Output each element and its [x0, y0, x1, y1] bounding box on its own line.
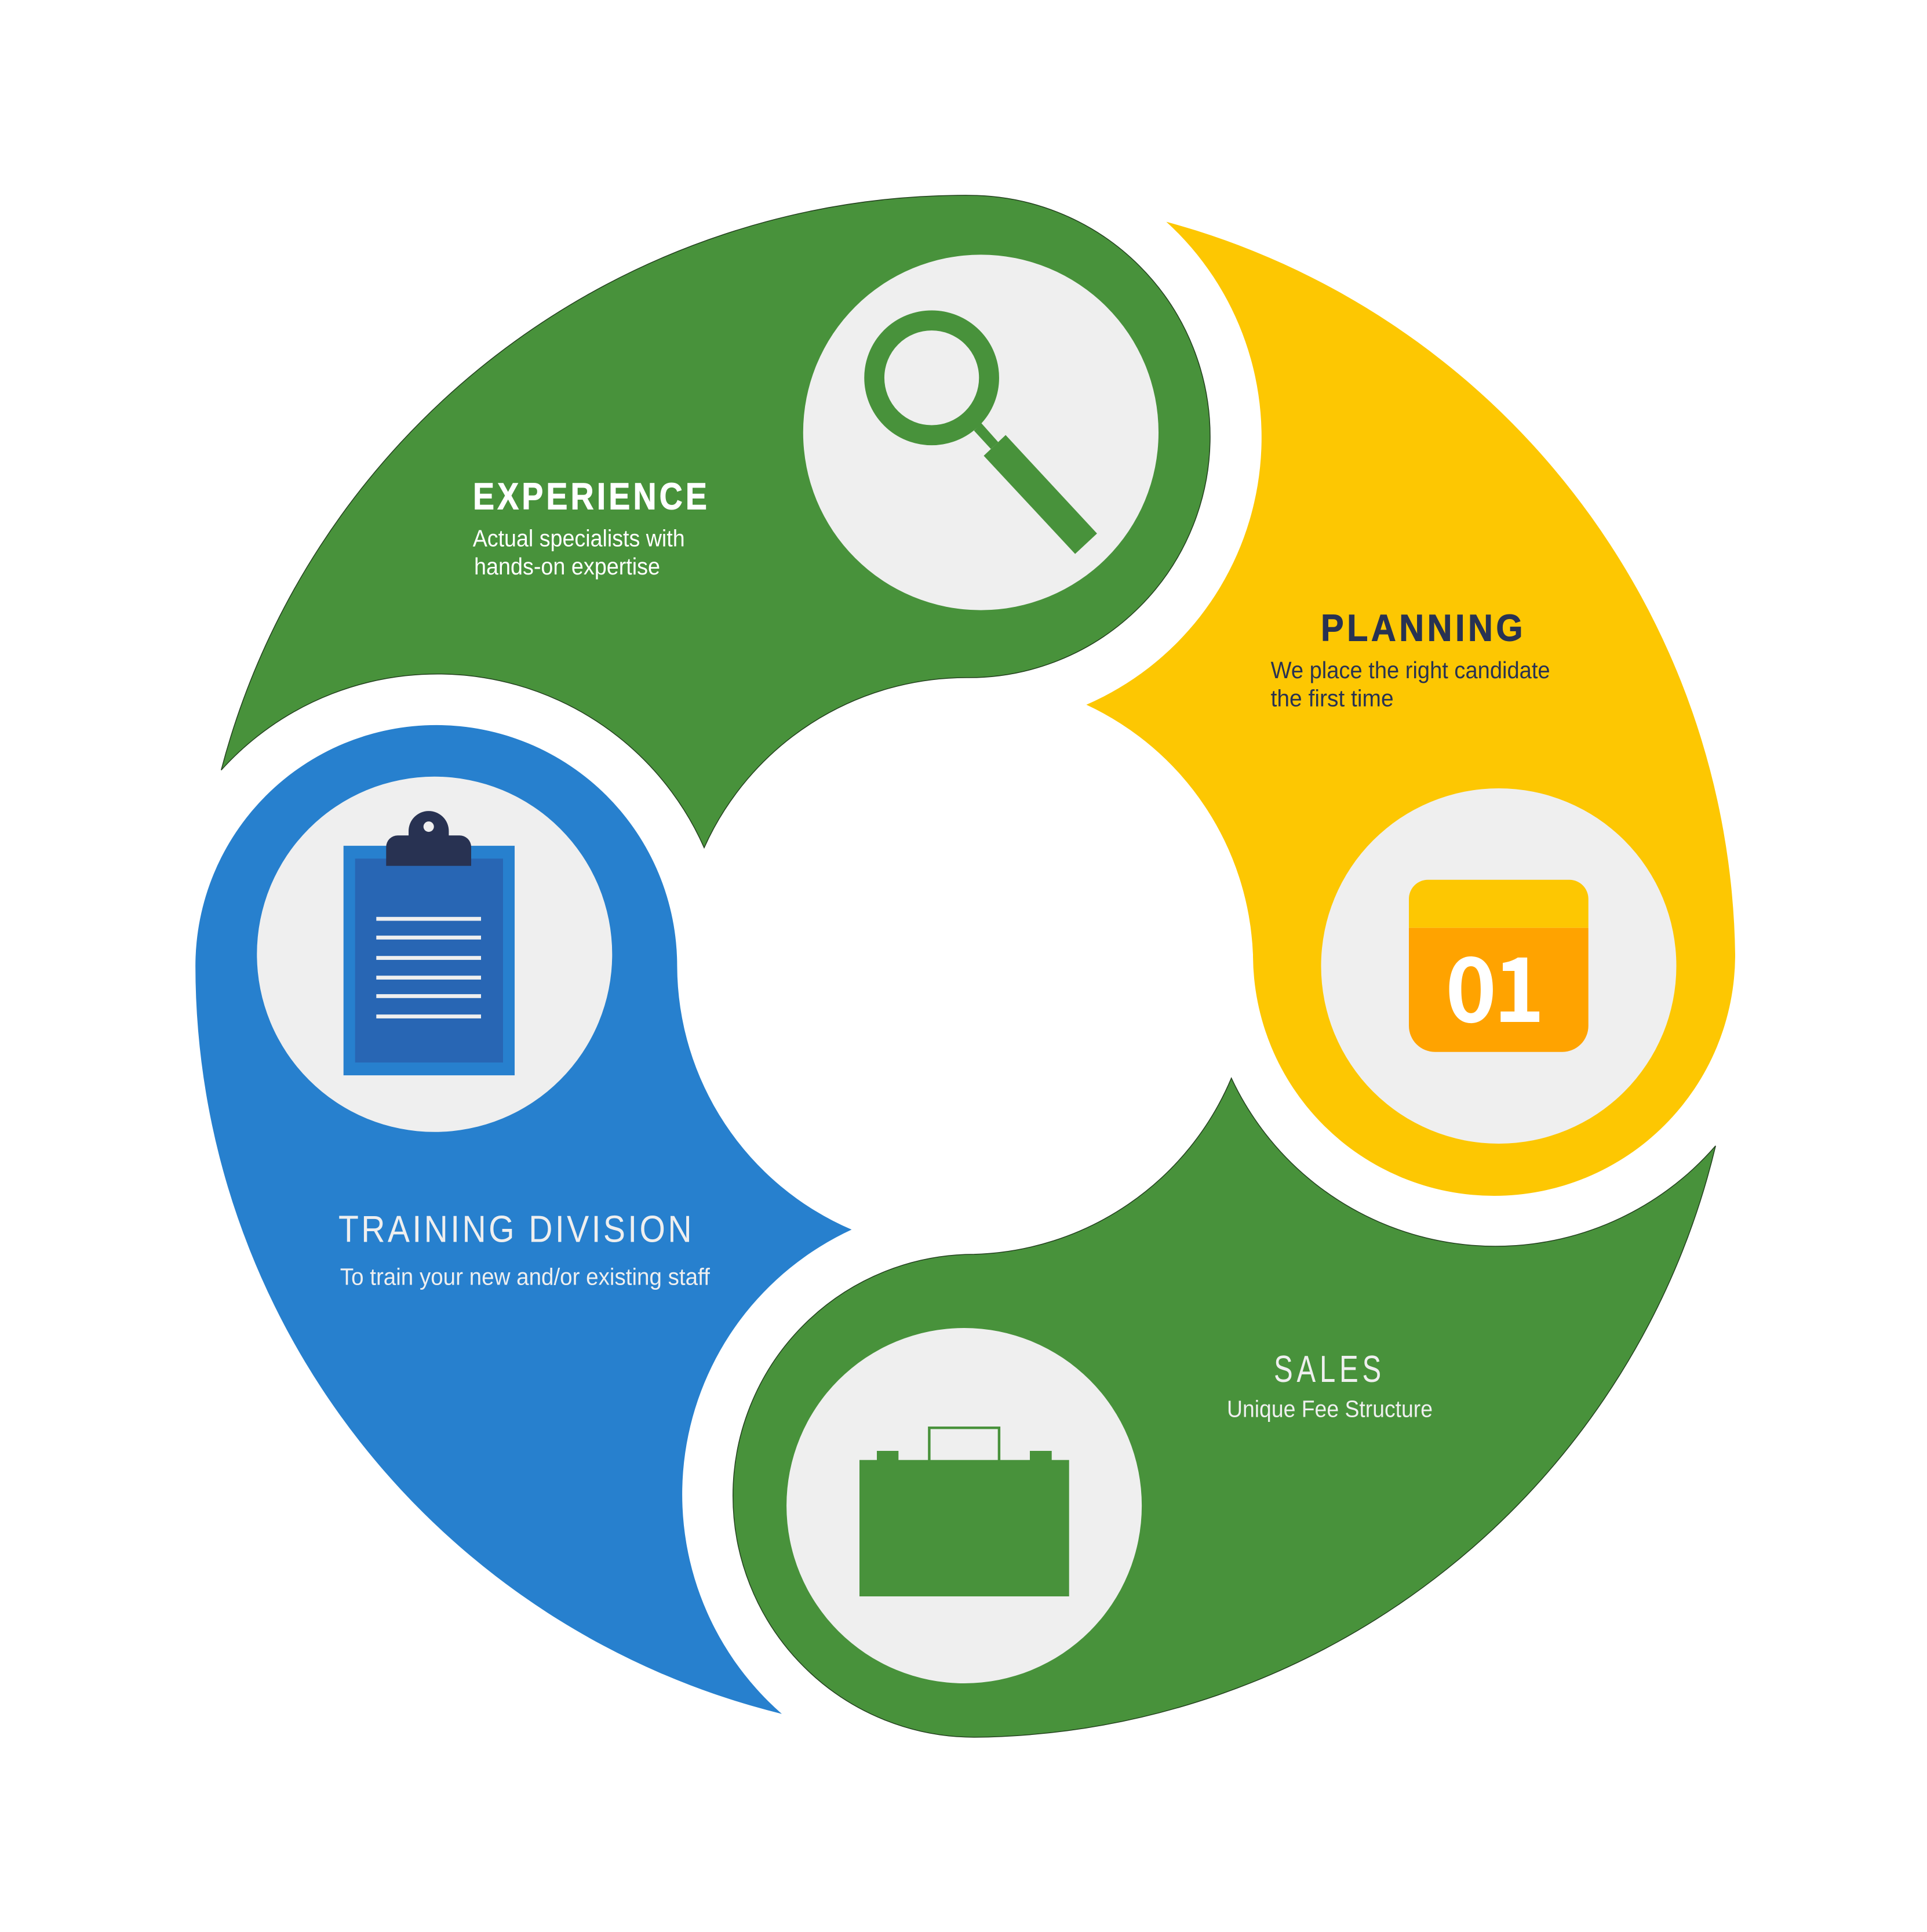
icon background circle	[803, 254, 1159, 610]
blue segment shape	[195, 725, 852, 1714]
description: training division: To train your new and/or existing staff	[340, 1264, 710, 1290]
icon: calendar: 0	[1445, 922, 1497, 1047]
description: sales: Unique Fee Structure	[1227, 1395, 1433, 1422]
description: experience: Actual specialists with	[473, 525, 685, 552]
panel: sales	[733, 1078, 1715, 1737]
icon: calendar	[1409, 880, 1589, 1052]
panel: training division	[195, 725, 852, 1714]
icon: calendar: 1	[1493, 922, 1545, 1047]
description: experience	[473, 525, 685, 580]
green segment shape	[733, 1078, 1715, 1737]
green segment shape	[221, 195, 1210, 847]
heading: planning: PLANNING	[1321, 606, 1526, 649]
icon: briefcase	[859, 1428, 1069, 1596]
heading: training division: TRAINING DIVISION	[338, 1207, 694, 1250]
icon: magnifying glass	[875, 321, 1097, 554]
description: planning	[1271, 657, 1550, 711]
heading: experience: EXPERIENCE	[473, 475, 710, 517]
icon background circle	[1321, 788, 1676, 1144]
panel: experience	[221, 195, 1210, 847]
panel: planning	[1086, 222, 1735, 1196]
icon background circle	[786, 1328, 1142, 1683]
description: planning: the first time	[1271, 685, 1394, 711]
description: planning: We place the right candidate	[1271, 657, 1550, 683]
icon: clipboard	[344, 811, 515, 1075]
heading: sales: SALES	[1274, 1348, 1385, 1390]
icon background circle	[257, 777, 612, 1132]
description: experience: hands-on expertise	[474, 553, 660, 580]
yellow segment shape	[1086, 222, 1735, 1196]
